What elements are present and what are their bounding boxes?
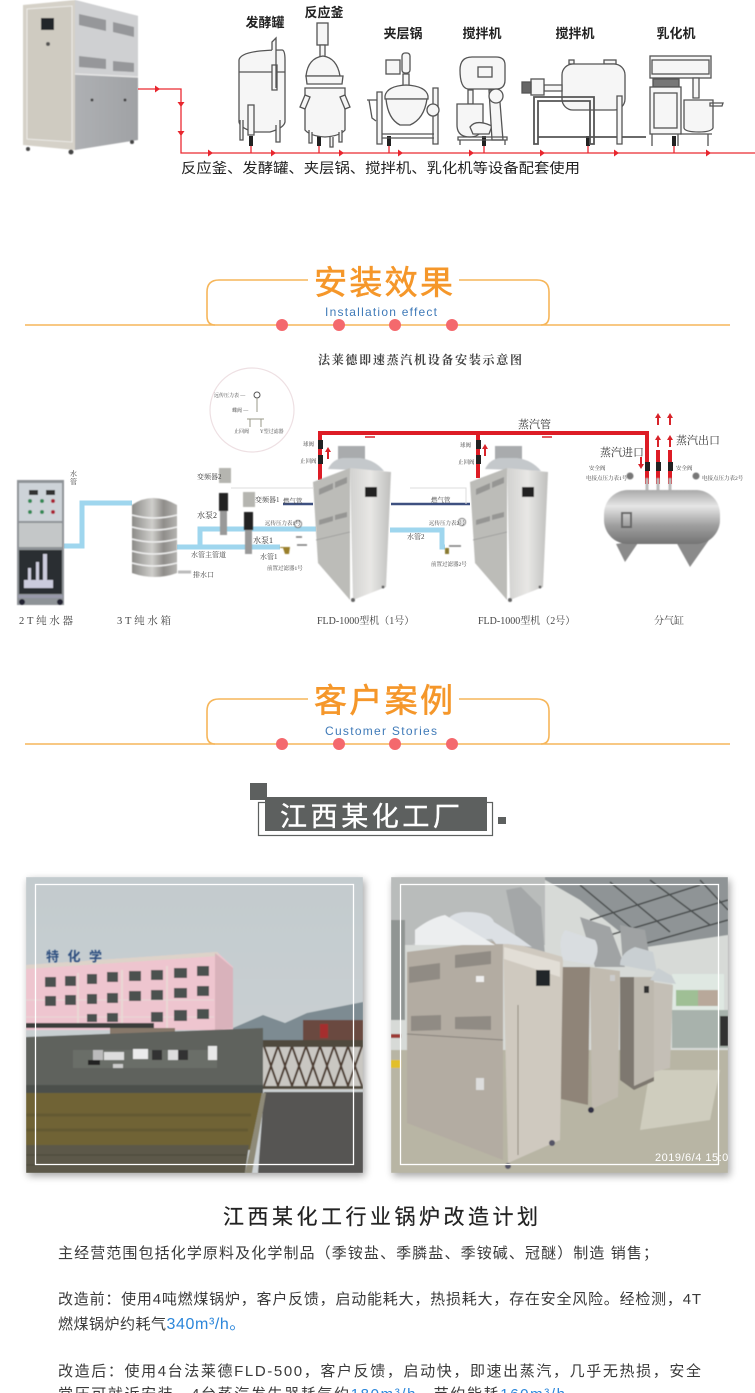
section heading: installation effect: Installation effect bbox=[325, 305, 438, 319]
section heading: installation effect bbox=[25, 264, 730, 331]
detail circle bbox=[210, 368, 294, 452]
panel: equipment supply diagram bbox=[23, 0, 755, 176]
icon: RO water purifier bbox=[17, 480, 64, 605]
equipment labels: 夹层锅 bbox=[383, 26, 423, 41]
icon: water tank bbox=[132, 498, 191, 577]
icon: reactor bbox=[300, 23, 350, 147]
icon: steam header bbox=[604, 472, 720, 567]
diagram labels bbox=[70, 417, 744, 579]
equipment labels: 反应釜 bbox=[304, 5, 344, 20]
diagram captions: FLD-1000型机（2号） bbox=[478, 614, 575, 627]
diagram labels: 前置过滤器2号 bbox=[431, 560, 467, 568]
gas pipes bbox=[283, 503, 470, 505]
diagram labels: 蒸汽管 bbox=[518, 417, 551, 431]
diagram labels: 管 bbox=[70, 477, 77, 486]
icon: steam generator bbox=[23, 0, 138, 154]
equipment labels: 乳化机 bbox=[656, 26, 696, 41]
photo timestamp: 2019/6/4 15:01 bbox=[655, 1152, 735, 1164]
diagram captions bbox=[19, 614, 684, 627]
chart: installation schematic bbox=[17, 368, 744, 627]
diagram labels: 变频器2 bbox=[197, 472, 222, 481]
icon: pumps and inverters bbox=[219, 468, 466, 554]
icon: emulsifier bbox=[650, 56, 723, 146]
water pipes bbox=[64, 503, 445, 547]
red steam line bbox=[138, 86, 755, 156]
diagram labels: 水管2 bbox=[407, 532, 425, 541]
caption: equipment usage: 反应釜、发酵罐、夹层锅、搅拌机、乳化机等设备配套使用 bbox=[181, 160, 580, 176]
photo: factory exterior bbox=[26, 877, 365, 1176]
banner: Jiangxi chemical plant: 江西某化工厂 bbox=[280, 802, 460, 832]
section heading: customer stories: Customer Stories bbox=[325, 724, 437, 738]
diagram labels: 球阀 bbox=[460, 441, 472, 449]
diagram labels: 水管1 bbox=[260, 552, 278, 561]
detail circle: 止回阀 bbox=[234, 428, 249, 435]
diagram labels: 水管主管道 bbox=[191, 550, 226, 559]
case study body text: 改造后：使用4台法莱德FLD-500，客户反馈，启动快，即速出蒸汽，几乎无热损，安全 bbox=[58, 1362, 701, 1380]
equipment labels: 搅拌机 bbox=[555, 26, 595, 41]
case study body text: 改造前：使用4吨燃煤锅炉，客户反馈，启动能耗大，热损耗大，存在安全风险。经检测，4T bbox=[58, 1290, 701, 1308]
section heading: customer stories: 客户案例 bbox=[314, 682, 453, 719]
diagram labels: 水 bbox=[70, 469, 77, 478]
detail circle: 远传压力表 — bbox=[214, 392, 246, 399]
diagram labels: 球阀 bbox=[303, 440, 315, 448]
diagram labels: 燃气管 bbox=[431, 495, 451, 504]
case study body text bbox=[58, 1245, 701, 1393]
case study body text: 主经营范围包括化学原料及化学制品（季铵盐、季膦盐、季铵碱、冠醚）制造 销售； bbox=[58, 1245, 658, 1262]
red steam pipes bbox=[320, 433, 670, 484]
diagram captions: 2T纯水器 bbox=[19, 614, 74, 627]
diagram labels: 变频器1 bbox=[255, 495, 280, 504]
case study body text: 燃煤锅炉约耗气340m³/h。 bbox=[58, 1315, 246, 1333]
detail circle: Y型过滤器 bbox=[260, 428, 284, 435]
equipment labels: 发酵罐 bbox=[245, 15, 285, 30]
section heading: customer stories bbox=[25, 682, 730, 750]
diagram labels: 远传压力表1号 bbox=[265, 519, 301, 527]
diagram labels: 止回阀 bbox=[458, 458, 475, 466]
diagram labels: 电接点压力表1号 bbox=[586, 474, 628, 482]
icon: horizontal mixer bbox=[522, 60, 646, 144]
icon: stand mixer bbox=[457, 57, 507, 145]
case study title: 江西某化工行业锅炉改造计划 bbox=[223, 1206, 538, 1229]
icon: jacketed kettle bbox=[367, 53, 439, 144]
diagram labels: 水泵1 bbox=[253, 535, 273, 545]
equipment labels bbox=[245, 5, 696, 41]
diagram labels: 排水口 bbox=[193, 570, 214, 579]
diagram caption: 法莱德即速蒸汽机设备安装示意图 bbox=[318, 352, 522, 367]
diagram labels: 前置过滤器1号 bbox=[267, 564, 303, 572]
diagram captions: FLD-1000型机（1号） bbox=[317, 614, 414, 627]
diagram labels: 水泵2 bbox=[197, 510, 217, 520]
icon: fermentation tank bbox=[239, 38, 285, 142]
diagram labels: 蒸汽出口 bbox=[676, 433, 720, 447]
diagram labels: 安全阀 bbox=[589, 464, 606, 472]
diagram labels: 止回阀 bbox=[300, 457, 317, 465]
diagram captions: 3T纯水箱 bbox=[117, 614, 172, 627]
building sign: 特化学 bbox=[46, 949, 102, 964]
valves bbox=[318, 440, 673, 471]
equipment labels: 搅拌机 bbox=[462, 26, 502, 41]
diagram captions: 分气缸 bbox=[654, 614, 684, 627]
section heading: installation effect: 安装效果 bbox=[314, 264, 453, 301]
icon: generator units bbox=[313, 446, 548, 602]
arrows bbox=[325, 413, 673, 469]
diagram labels: 安全阀 bbox=[676, 464, 693, 472]
detail circle: 蝶阀 — bbox=[232, 407, 249, 414]
photo: installed generators bbox=[391, 877, 735, 1176]
banner: Jiangxi chemical plant bbox=[250, 783, 506, 836]
diagram labels: 蒸汽进口 bbox=[600, 445, 644, 459]
diagram labels: 燃气管 bbox=[283, 496, 303, 505]
diagram labels: 远传压力表2号 bbox=[429, 519, 465, 527]
diagram labels: 电接点压力表2号 bbox=[702, 474, 744, 482]
